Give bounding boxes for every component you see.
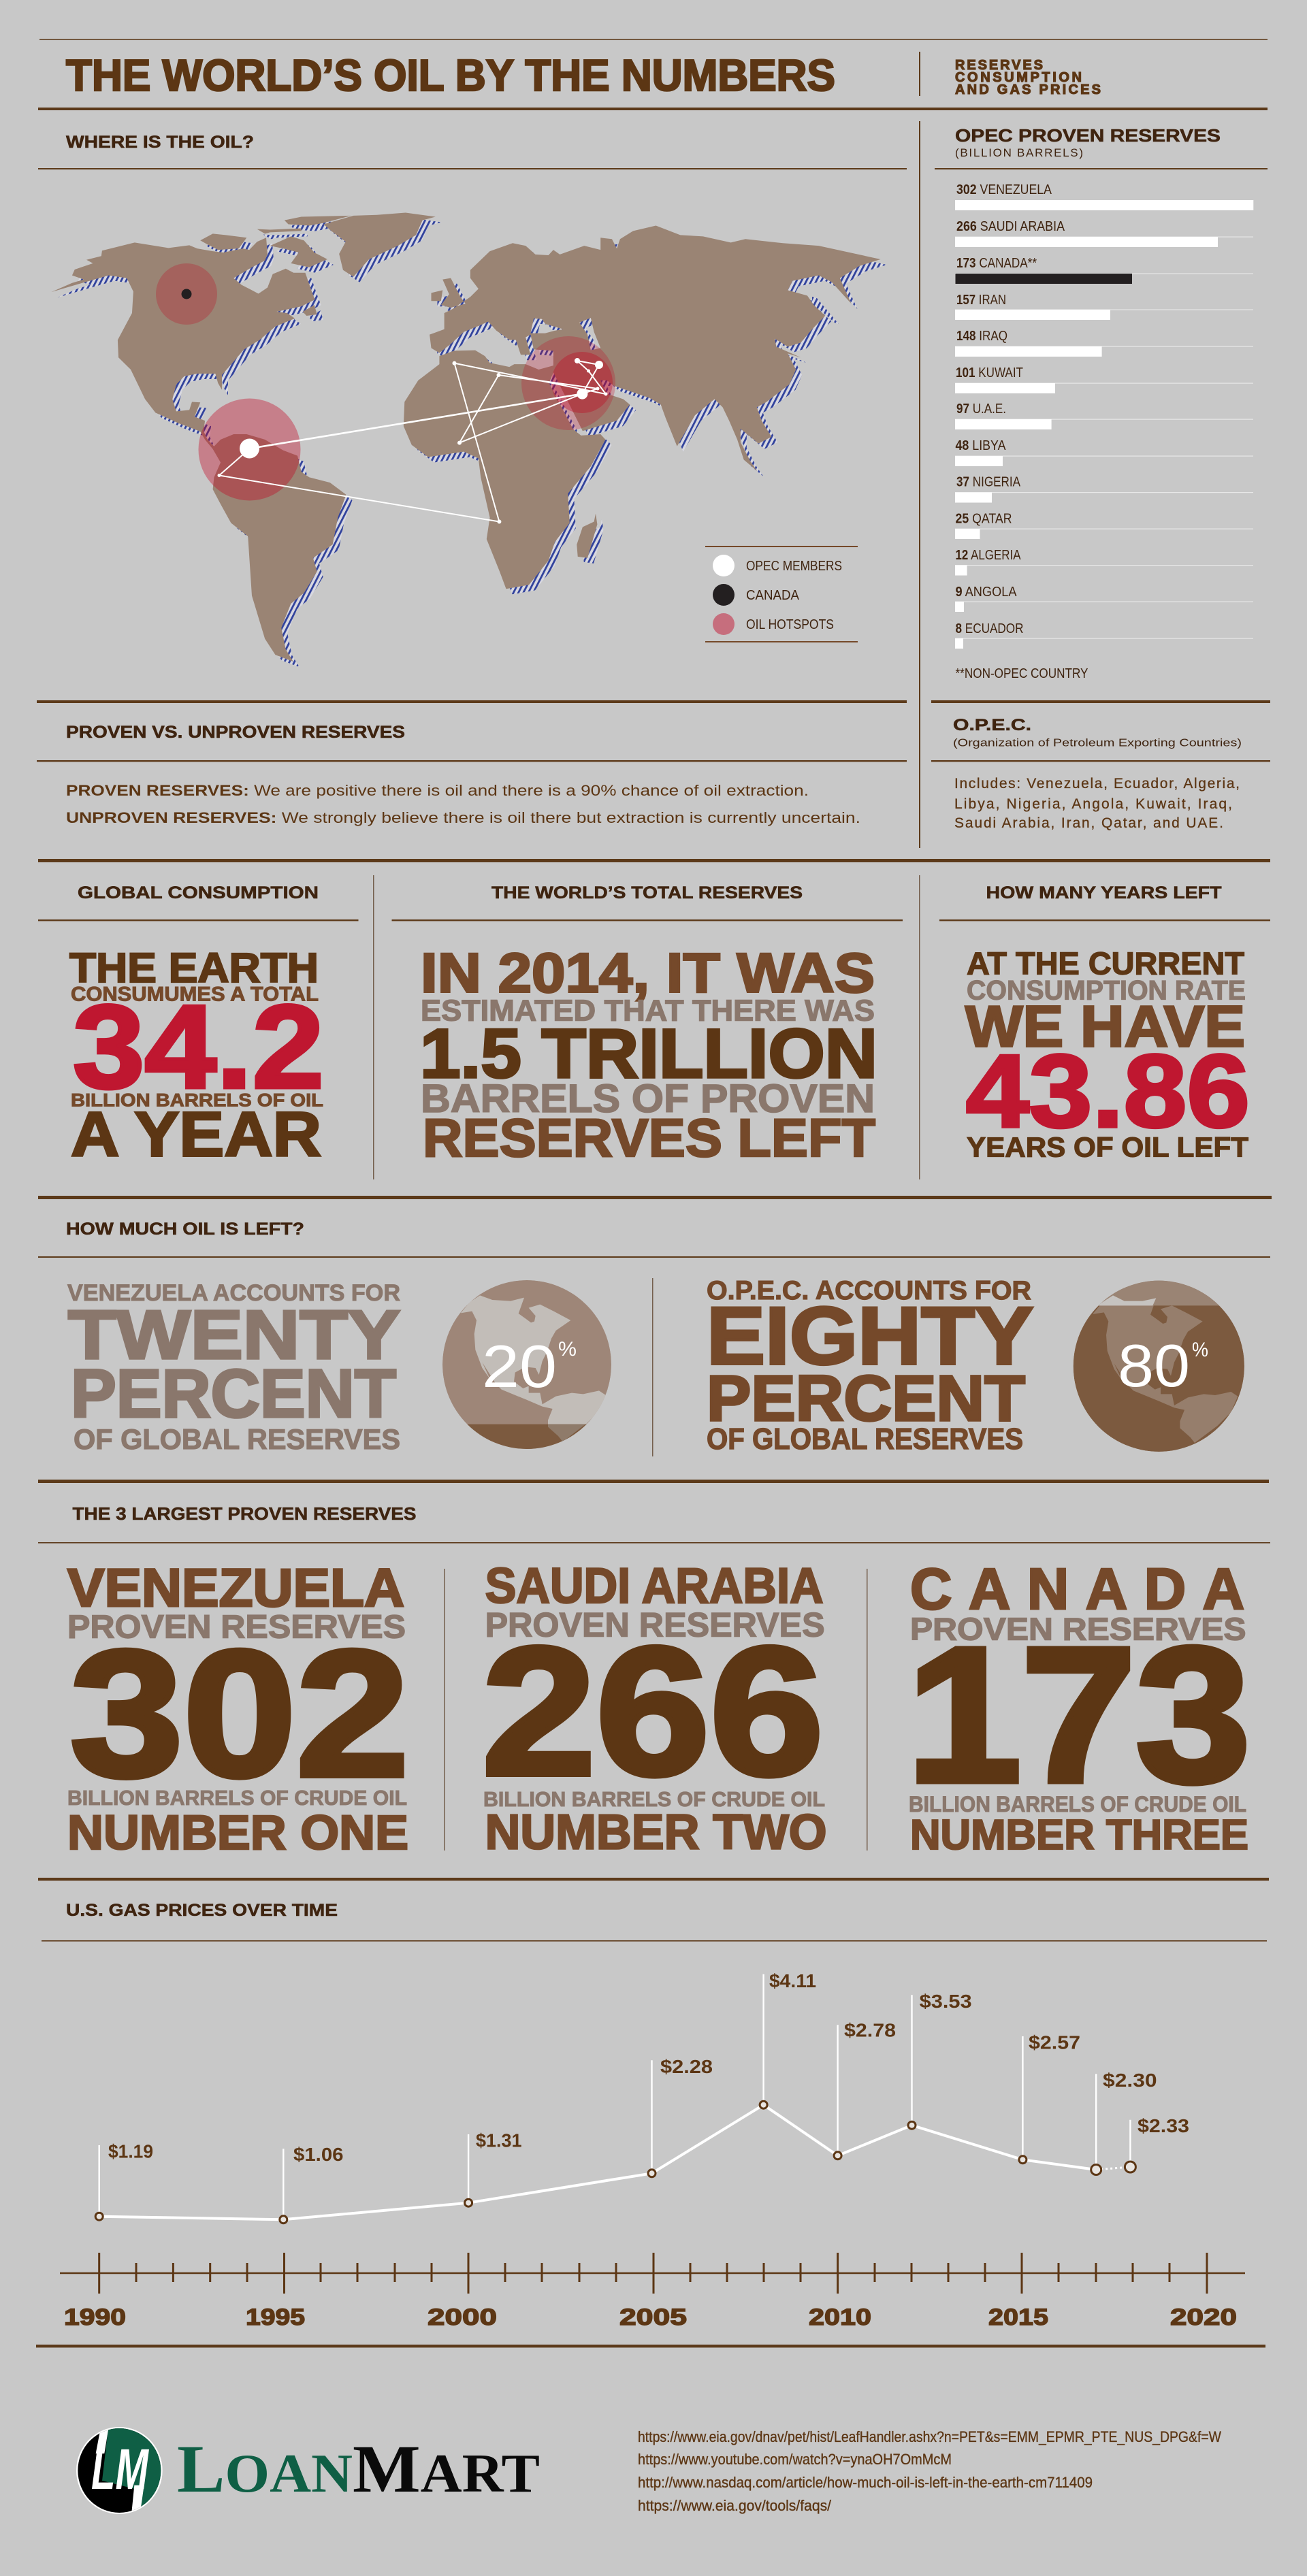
map legend: OPEC MEMBERS [746, 559, 842, 574]
price labels: $2.57 [1029, 2032, 1080, 2053]
price line [99, 2105, 1096, 2219]
panel: how many years left: YEARS OF OIL LEFT [967, 1131, 1248, 1162]
oil hotspot: Canada [156, 263, 217, 325]
bar chart: proven reserves: 25 QATAR [956, 512, 1012, 527]
bar chart: proven reserves: 37 NIGERIA [956, 475, 1021, 490]
panel: Venezuela 302: PROVEN RESERVES [67, 1609, 406, 1646]
sources list: https://www.eia.gov/tools/faqs/ [638, 2497, 832, 2514]
panel: OPEC definition: O.P.E.C. [953, 716, 1031, 734]
bar chart: proven reserves: 157 IRAN [956, 293, 1006, 308]
year labels: 2000 [427, 2304, 497, 2330]
panel: Saudi Arabia 266: 266 [482, 1609, 824, 1813]
panel: Saudi Arabia 266: BILLION BARRELS OF CRUDE OIL [483, 1787, 825, 1811]
panel: OPEC proven reserves heading: OPEC PROVEN RESERVES [955, 125, 1221, 146]
panel: Venezuela 302: NUMBER ONE [67, 1806, 408, 1860]
panel: global consumption: THE EARTH [69, 945, 319, 991]
year labels: 2010 [809, 2304, 871, 2330]
price labels: $1.19 [108, 2141, 153, 2162]
panel: OPEC definition: Saudi Arabia, Iran, Qatar, and UAE. [954, 815, 1223, 831]
panel: Canada 173 [907, 1557, 1250, 1859]
oil hotspot: Middle East outer [521, 336, 615, 430]
bar chart: proven reserves: 266 SAUDI ARABIA [956, 219, 1065, 234]
line chart: U.S. gas prices [60, 1970, 1245, 2330]
bar chart: proven reserves: 173 CANADA** [956, 256, 1037, 271]
panel: Canada 173: CANADA [910, 1557, 1244, 1622]
header subtitle: reserves, consumption and gas prices: AND GAS PRICES [955, 82, 1101, 97]
header subtitle: reserves, consumption and gas prices: RESERVES [955, 58, 1043, 73]
panel: world's total reserves [420, 883, 877, 1168]
panel: Saudi Arabia 266: SAUDI ARABIA [485, 1559, 824, 1614]
price labels: $3.53 [920, 1991, 972, 2012]
panel: how many years left [965, 883, 1250, 1162]
logo: LoanMart [75, 2426, 540, 2517]
panel: Canada 173: 173 [907, 1608, 1250, 1822]
icon: globe 20 percent [442, 1280, 611, 1449]
heading: 3 largest proven reserves: THE 3 LARGEST PROVEN RESERVES [72, 1503, 417, 1524]
panel: OPEC definition: (Organization of Petroleum Exporting Countries) [953, 738, 1242, 749]
panel: OPEC definition: Includes: Venezuela, Ecuador, Algeria, [954, 776, 1240, 792]
panel: Venezuela twenty percent: TWENTY [68, 1297, 400, 1373]
map legend: OIL HOTSPOTS [746, 617, 834, 632]
panel: Canada 173: NUMBER THREE [910, 1812, 1248, 1859]
world map [52, 212, 886, 667]
heading: how much oil is left: HOW MUCH OIL IS LEFT? [66, 1220, 304, 1239]
bar chart: proven reserves [955, 182, 1253, 681]
panel: world's total reserves: IN 2014, IT WAS [421, 942, 875, 1005]
icon: globe 20 percent: % [558, 1338, 577, 1360]
oil hotspot: Venezuela [199, 399, 301, 501]
panel: world's total reserves: 1.5 TRILLION [420, 1015, 877, 1092]
panel: global consumption: BILLION BARRELS OF OIL [71, 1090, 323, 1111]
year labels: 1995 [246, 2304, 305, 2330]
bar chart: proven reserves: 9 ANGOLA [956, 585, 1017, 600]
bar chart: proven reserves: 48 LIBYA [956, 438, 1006, 453]
logo mark: LM [91, 2437, 149, 2501]
panel: Venezuela twenty percent: VENEZUELA ACCOUNTS FOR [67, 1280, 400, 1306]
bar chart: proven reserves: 148 IRAQ [956, 329, 1007, 344]
panel: OPEC eighty percent [707, 1276, 1033, 1456]
data points [95, 2101, 1135, 2223]
bar chart: proven reserves: 12 ALGERIA [956, 548, 1021, 563]
logo mark [75, 2426, 165, 2517]
panel: world's total reserves: BARRELS OF PROVEN [421, 1077, 875, 1121]
year labels [64, 2304, 1237, 2330]
icon: globe 80 percent [1073, 1281, 1244, 1452]
panel: world's total reserves: ESTIMATED THAT THERE WAS [421, 994, 875, 1028]
heading: where is the oil: WHERE IS THE OIL? [66, 133, 254, 152]
panel: Venezuela twenty percent [67, 1280, 400, 1455]
panel: OPEC proven reserves heading [955, 125, 1221, 159]
panel: global consumption: 34.2 [73, 980, 324, 1113]
price labels: $2.28 [660, 2056, 713, 2077]
logo wordmark: LOANMART [177, 2431, 540, 2507]
price stems [99, 1974, 1130, 2219]
panel: Saudi Arabia 266 [482, 1559, 827, 1859]
sources list: https://www.youtube.com/watch?v=ynaOH7OmMcM [638, 2451, 952, 2468]
heading: gas prices: U.S. GAS PRICES OVER TIME [66, 1901, 338, 1920]
panel: Canada 173: BILLION BARRELS OF CRUDE OIL [909, 1792, 1246, 1816]
panel: how many years left: CONSUMPTION RATE [967, 976, 1246, 1006]
projected segment [1096, 2167, 1130, 2170]
panel: OPEC eighty percent: PERCENT [707, 1363, 1025, 1435]
panel: Venezuela 302: 302 [70, 1613, 409, 1814]
price labels: $2.30 [1103, 2070, 1157, 2091]
price labels: $4.11 [769, 1970, 816, 1991]
footnote: **NON-OPEC COUNTRY [956, 666, 1088, 681]
OPEC network lines [219, 361, 606, 521]
sources list [638, 2428, 1221, 2514]
sources list: https://www.eia.gov/dnav/pet/hist/LeafHandler.ashx?n=PET&s=EMM_EPMR_PTE_NUS_DPG&f=W [638, 2428, 1221, 2445]
year labels: 2005 [619, 2304, 687, 2330]
map legend: CANADA [746, 588, 800, 603]
bar chart: proven reserves: 101 KUWAIT [956, 365, 1023, 380]
panel: Venezuela 302: VENEZUELA [67, 1557, 404, 1618]
panel: Saudi Arabia 266: PROVEN RESERVES [485, 1606, 825, 1644]
year labels: 1990 [64, 2304, 126, 2330]
panel: how many years left: HOW MANY YEARS LEFT [986, 883, 1221, 902]
bar chart: proven reserves: 8 ECUADOR [956, 621, 1024, 636]
panel: global consumption: GLOBAL CONSUMPTION [78, 883, 319, 902]
title: THE WORLD’S OIL BY THE NUMBERS [66, 50, 835, 100]
panel: global consumption: A YEAR [71, 1098, 321, 1169]
panel: Saudi Arabia 266: NUMBER TWO [485, 1805, 827, 1859]
header subtitle: reserves, consumption and gas prices [955, 58, 1101, 97]
bar chart: proven reserves: 97 U.A.E. [956, 402, 1006, 417]
header rules [38, 39, 1268, 848]
icon: globe 20 percent: 20 [482, 1333, 557, 1400]
price labels: $2.78 [844, 2020, 896, 2041]
price labels [108, 1970, 1189, 2165]
panel: how many years left: AT THE CURRENT [967, 946, 1244, 981]
price labels: $2.33 [1137, 2115, 1189, 2136]
bar chart: proven reserves: 302 VENEZUELA [956, 182, 1052, 197]
panel: how many years left: 43.86 [966, 1033, 1250, 1149]
map legend [705, 546, 858, 642]
icon: globe 80 percent: % [1192, 1339, 1208, 1361]
panel: OPEC eighty percent: OF GLOBAL RESERVES [707, 1422, 1023, 1456]
section rules [36, 700, 1272, 2347]
panel: proven vs unproven reserves: UNPROVEN RESERVES: We strongly believe there is oil there but extraction is currently uncertain. [66, 809, 860, 826]
panel: global consumption [69, 883, 324, 1169]
panel: Venezuela 302 [67, 1557, 409, 1860]
panel: Venezuela 302: BILLION BARRELS OF CRUDE OIL [67, 1786, 407, 1810]
Canada dot [181, 289, 192, 299]
sources list: http://www.nasdaq.com/article/how-much-oil-is-left-in-the-earth-cm711409 [638, 2474, 1093, 2491]
header subtitle: reserves, consumption and gas prices: CONSUMPTION [955, 70, 1082, 85]
price labels: $1.06 [293, 2144, 343, 2165]
panel: world's total reserves: THE WORLD’S TOTAL RESERVES [491, 883, 803, 902]
year labels: 2015 [988, 2304, 1048, 2330]
panel: OPEC eighty percent: O.P.E.C. ACCOUNTS FOR [707, 1276, 1031, 1305]
panel: global consumption: CONSUMUMES A TOTAL [71, 983, 319, 1006]
panel: proven vs unproven reserves: PROVEN VS. UNPROVEN RESERVES [66, 723, 405, 742]
panel: Venezuela twenty percent: OF GLOBAL RESERVES [74, 1423, 400, 1455]
panel: proven vs unproven reserves: PROVEN RESERVES: We are positive there is oil and there is a 90% chance of oil extraction. [66, 782, 809, 799]
panel: OPEC proven reserves heading: (BILLION BARRELS) [955, 146, 1083, 159]
panel: OPEC definition: Libya, Nigeria, Angola, Kuwait, Iraq, [954, 796, 1232, 812]
panel: how many years left: WE HAVE [965, 995, 1245, 1059]
year labels: 2020 [1170, 2304, 1237, 2330]
panel: Venezuela twenty percent: PERCENT [71, 1356, 396, 1432]
OPEC member dots [218, 358, 607, 524]
oil hotspot: Middle East inner [551, 352, 613, 413]
panel: OPEC definition [953, 716, 1242, 831]
icon: globe 80 percent: 80 [1118, 1332, 1190, 1399]
price labels: $1.31 [476, 2130, 521, 2151]
timeline axis [60, 2253, 1245, 2294]
panel: OPEC eighty percent: EIGHTY [707, 1290, 1033, 1382]
panel: world's total reserves: RESERVES LEFT [423, 1107, 875, 1168]
panel: Canada 173: PROVEN RESERVES [910, 1612, 1246, 1647]
panel: proven vs unproven reserves [66, 723, 860, 826]
